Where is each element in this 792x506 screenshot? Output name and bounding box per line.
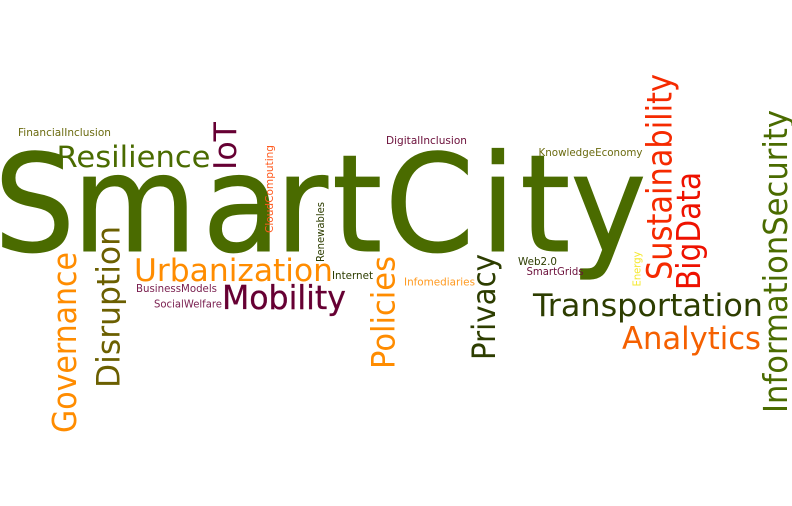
word: Policies: Policies	[364, 256, 402, 369]
word: Disruption: Disruption	[90, 226, 128, 388]
word: DigitalInclusion: DigitalInclusion	[386, 135, 467, 147]
word: SmartGrids: SmartGrids	[526, 265, 584, 278]
word: KnowledgeEconomy: KnowledgeEconomy	[538, 147, 642, 159]
word: Internet: Internet	[332, 270, 373, 282]
word: Resilience: Resilience	[56, 140, 210, 174]
word: Urbanization: Urbanization	[134, 253, 333, 289]
word: Transportation: Transportation	[532, 288, 763, 324]
word: FinancialInclusion: FinancialInclusion	[18, 127, 111, 139]
word: IoT: IoT	[208, 121, 244, 170]
word: SocialWelfare: SocialWelfare	[154, 298, 222, 310]
word: Analytics: Analytics	[622, 321, 761, 357]
word: Privacy: Privacy	[465, 254, 503, 360]
word: Energy: Energy	[632, 252, 644, 286]
word: Mobility: Mobility	[222, 278, 346, 317]
word: BusinessModels: BusinessModels	[136, 282, 217, 295]
word: Governance: Governance	[45, 252, 84, 433]
word: BigData: BigData	[669, 172, 708, 290]
title word: SmartCity: SmartCity	[0, 127, 646, 284]
word: Sustainability: Sustainability	[640, 74, 680, 280]
word: CloudComputing: CloudComputing	[263, 145, 276, 233]
word: Renewables: Renewables	[315, 202, 327, 262]
word: Web2.0: Web2.0	[518, 255, 557, 268]
word: Infomediaries: Infomediaries	[404, 276, 475, 288]
